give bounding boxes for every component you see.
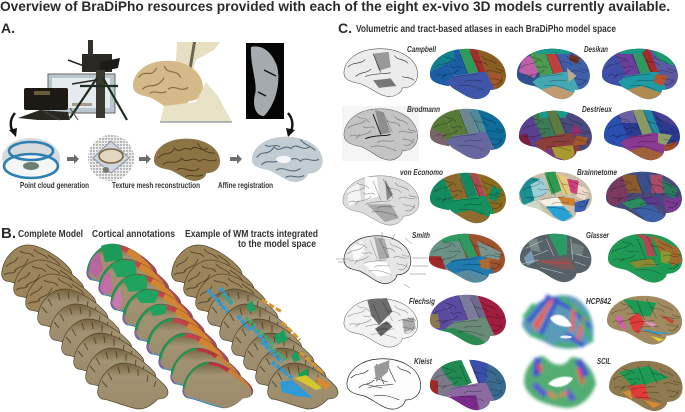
brain: SCIL tracts in model bbox=[609, 361, 683, 411]
brain: Flechsig atlas bbox=[430, 294, 506, 346]
label: Glasser: Glasser bbox=[586, 230, 610, 240]
heading: complete model: Complete Model bbox=[18, 229, 83, 240]
label: HCP842: HCP842 bbox=[586, 296, 611, 306]
brain: Campbell atlas bbox=[430, 48, 506, 100]
arrow: left curved bbox=[9, 113, 17, 137]
label: Smith: Smith bbox=[412, 230, 430, 240]
label: Brainnetome: Brainnetome bbox=[577, 167, 617, 177]
brain: Desikan pial bbox=[516, 48, 590, 100]
brain: von Economo atlas bbox=[430, 172, 506, 224]
brain: Brodmann atlas bbox=[430, 108, 506, 160]
brain: Kleist atlas bbox=[430, 360, 506, 410]
photo: camera rig bbox=[18, 40, 127, 120]
label: SCIL: SCIL bbox=[597, 356, 611, 366]
heading: cortical annotations: Cortical annotations bbox=[92, 229, 175, 240]
label: von Economo: von Economo bbox=[400, 167, 443, 177]
brain: Destrieux pial bbox=[518, 110, 592, 160]
photo: dissection of brain bbox=[133, 42, 232, 122]
heading C: C. bbox=[338, 20, 352, 36]
stack: WM tracts bbox=[172, 245, 338, 409]
label: Campbell: Campbell bbox=[407, 44, 436, 54]
label: Flechsig: Flechsig bbox=[409, 296, 436, 306]
heading: WM tracts line 2: to the model space bbox=[238, 239, 316, 250]
brain: Destrieux bbox=[604, 110, 680, 160]
arrow: grey 3 bbox=[230, 154, 242, 164]
drawing: von Economo bbox=[343, 176, 419, 225]
drawing: Kleist bbox=[347, 359, 421, 409]
brain: Glasser bbox=[608, 233, 685, 285]
panel A: acquisition workflow bbox=[1, 20, 323, 190]
stack: complete model bbox=[2, 245, 168, 409]
icon: point cloud rings bbox=[2, 138, 60, 178]
label: Kleist: Kleist bbox=[414, 356, 433, 366]
tracts: SCIL bbox=[524, 356, 596, 408]
photo: MRI slice bbox=[246, 43, 284, 119]
panel B: model slices bbox=[1, 225, 338, 409]
drawing: Smith bbox=[336, 232, 428, 288]
label: Destrieux: Destrieux bbox=[582, 104, 613, 114]
caption: point cloud generation: Point cloud generation bbox=[20, 180, 89, 190]
caption: affine registration: Affine registration bbox=[218, 180, 273, 190]
icon: mesh circle bbox=[88, 135, 134, 181]
brain: Glasser pial bbox=[520, 234, 592, 282]
drawing: Brodmann bbox=[342, 106, 419, 161]
arrow: grey 1 bbox=[67, 154, 79, 164]
icon: silver brain bbox=[252, 137, 323, 182]
brain: Brainnetome bbox=[606, 171, 685, 225]
caption: texture mesh reconstruction: Texture mesh reconstruction bbox=[112, 180, 200, 190]
arrow: right curved bbox=[286, 113, 295, 137]
heading: WM tracts: Example of WM tracts integrated bbox=[185, 229, 318, 240]
drawing: Flechsig bbox=[344, 298, 418, 347]
stack: cortical annotations bbox=[87, 244, 253, 408]
tracts: HCP842 bbox=[522, 295, 593, 349]
brain: Smith atlas bbox=[428, 234, 505, 283]
brain: Desikan bbox=[602, 48, 678, 100]
drawing: Campbell bbox=[344, 49, 418, 97]
panel C: atlases bbox=[336, 20, 685, 412]
heading B: B. bbox=[1, 225, 16, 242]
label: Desikan: Desikan bbox=[584, 44, 608, 54]
heading A: A. bbox=[1, 20, 15, 36]
brain: HCP842 tracts in model bbox=[607, 296, 682, 345]
tract overlays bbox=[208, 288, 330, 398]
icon: textured brain bbox=[154, 139, 220, 181]
label: Brodmann: Brodmann bbox=[407, 104, 440, 114]
heading: atlases title: Volumetric and tract-based atlases in each BraDiPho model space bbox=[356, 23, 616, 35]
brain: Brainnetome pial bbox=[519, 172, 592, 222]
arrow: grey 2 bbox=[139, 154, 151, 164]
